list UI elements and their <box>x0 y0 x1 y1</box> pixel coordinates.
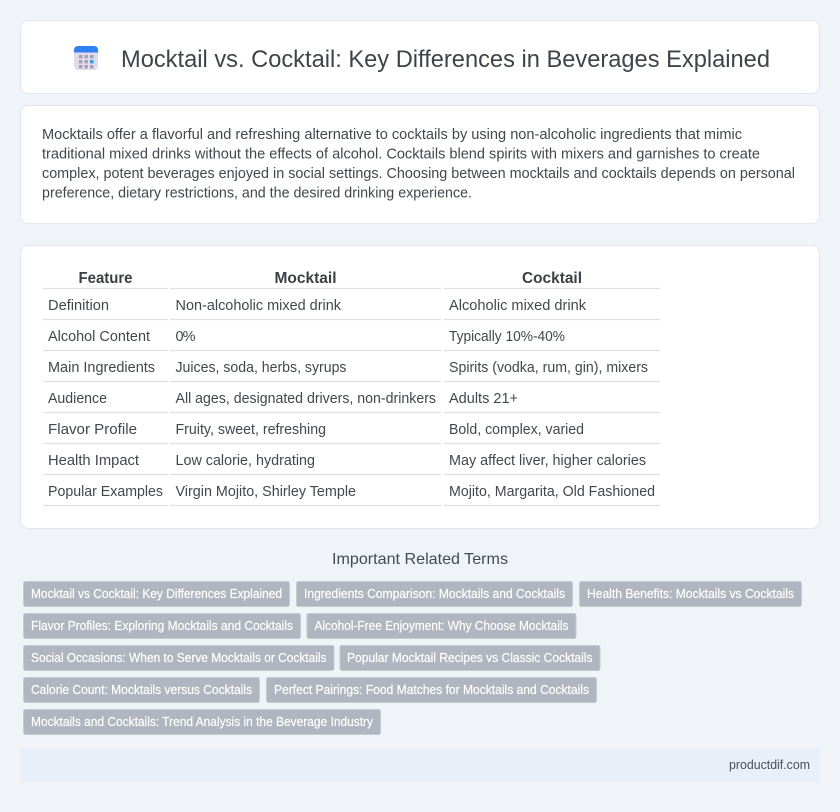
tag: Mocktail vs Cocktail: Key Differences Explained <box>31 587 282 601</box>
row: main ingredients: Juices, soda, herbs, syrups <box>176 360 346 376</box>
tag <box>340 646 600 670</box>
row: main ingredients <box>48 360 648 376</box>
row: health impact: Health Impact <box>48 453 139 469</box>
tag <box>266 678 596 702</box>
tag: Perfect Pairings: Food Matches for Mocktails and Cocktails <box>274 683 589 697</box>
tag <box>580 582 802 606</box>
panel: comparison table <box>20 246 820 528</box>
row: audience: Audience <box>48 391 107 407</box>
row: audience: All ages, designated drivers, non-drinkers <box>176 391 436 407</box>
table header row: Feature <box>78 270 133 287</box>
row: popular examples: Virgin Mojito, Shirley Temple <box>176 484 356 500</box>
row: health impact: May affect liver, higher calories <box>449 453 646 469</box>
table header row: Mocktail <box>274 270 336 287</box>
panel: description <box>20 106 820 224</box>
text block: introduction: preference, dietary restrictions, and the desired drinking experience. <box>42 186 472 202</box>
row: popular examples: Mojito, Margarita, Old Fashioned <box>449 484 655 500</box>
tag: Alcohol-Free Enjoyment: Why Choose Mocktails <box>314 619 568 633</box>
row: flavor profile: Bold, complex, varied <box>449 422 584 438</box>
row: flavor profile: Fruity, sweet, refreshing <box>176 422 326 438</box>
tag: Calorie Count: Mocktails versus Cocktails <box>31 683 252 697</box>
tag <box>24 710 380 734</box>
row: flavor profile <box>48 422 584 438</box>
tag: Popular Mocktail Recipes vs Classic Cocktails <box>347 651 592 665</box>
tag: Mocktails and Cocktails: Trend Analysis in the Beverage Industry <box>31 715 374 729</box>
row: alcohol content: Typically 10%-40% <box>449 329 565 345</box>
row: flavor profile: Flavor Profile <box>48 422 137 438</box>
table header row <box>78 270 582 287</box>
row: definition <box>48 298 587 314</box>
row: definition: Definition <box>48 298 109 314</box>
tag: Health Benefits: Mocktails vs Cocktails <box>587 587 794 601</box>
text block: introduction: traditional mixed drinks without the effects of alcohol. Cocktails blend spirits with mixers and garnishes to create <box>42 146 760 162</box>
tag: Social Occasions: When to Serve Mocktails or Cocktails <box>31 651 326 665</box>
text block: introduction: complex, potent beverages enjoyed in social settings. Choosing between mocktails and cocktails depends on personal <box>42 166 795 182</box>
tag <box>307 614 576 638</box>
row: alcohol content <box>48 329 565 345</box>
heading: important related terms: Important Related Terms <box>332 551 508 568</box>
icon: calendar <box>74 46 98 70</box>
header panel <box>20 20 820 94</box>
row: popular examples <box>48 484 655 500</box>
row: audience: Adults 21+ <box>449 391 518 407</box>
footer source link text: productdif.com <box>729 758 810 772</box>
text block: introduction: Mocktails offer a flavorful and refreshing alternative to cocktails by using non-alcoholic ingredients that mimic <box>42 127 742 143</box>
tag <box>24 614 300 638</box>
tag list: related terms <box>24 582 802 734</box>
row: main ingredients: Spirits (vodka, rum, gin), mixers <box>449 360 648 376</box>
table header row: Cocktail <box>522 270 582 287</box>
row: health impact <box>48 453 646 469</box>
tag: Flavor Profiles: Exploring Mocktails and Cocktails <box>31 619 293 633</box>
row: audience <box>48 391 518 407</box>
row: alcohol content: Alcohol Content <box>48 329 150 345</box>
footer <box>20 748 820 782</box>
text block: introduction <box>42 127 795 202</box>
row: definition: Non-alcoholic mixed drink <box>176 298 342 314</box>
tag: Ingredients Comparison: Mocktails and Cocktails <box>304 587 565 601</box>
tag <box>296 582 572 606</box>
row: main ingredients: Main Ingredients <box>48 360 155 376</box>
row: popular examples: Popular Examples <box>48 484 163 500</box>
title: Mocktail vs. Cocktail: Key Differences in Beverages Explained <box>121 46 770 73</box>
row: definition: Alcoholic mixed drink <box>449 298 587 314</box>
row: health impact: Low calorie, hydrating <box>176 453 315 469</box>
tag <box>24 646 334 670</box>
tag <box>24 678 260 702</box>
tag <box>24 582 290 606</box>
row: alcohol content: 0% <box>176 329 196 345</box>
